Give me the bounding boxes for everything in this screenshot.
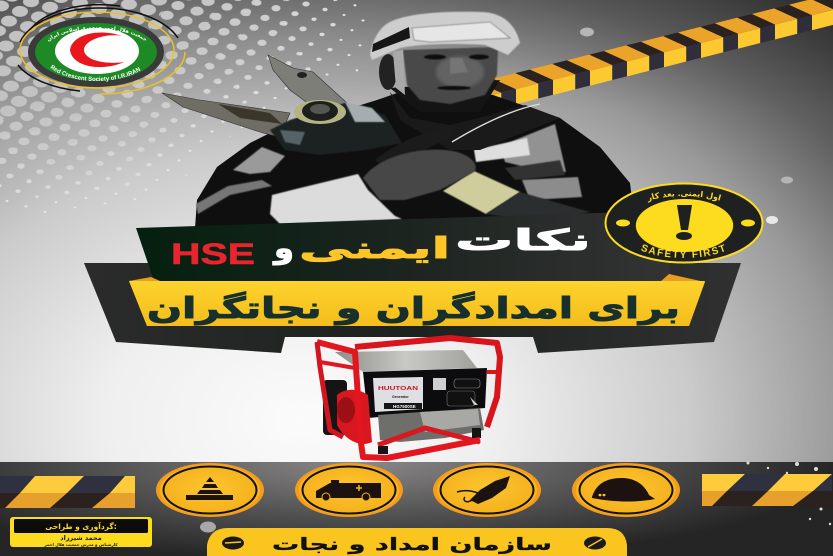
chest pads	[474, 124, 582, 200]
rescue worker with hydraulic cutter	[162, 12, 636, 228]
small grey dot	[200, 522, 216, 532]
cutter pivot	[294, 100, 346, 124]
title word: HSE: HSE	[171, 238, 255, 271]
left hazard stripes	[0, 476, 135, 508]
glove	[363, 150, 476, 200]
front frame	[317, 342, 480, 458]
exclamation mark	[677, 205, 692, 230]
icon: safety helmet	[572, 463, 680, 517]
badge text: اول ایمنی. بعد کار	[648, 190, 722, 203]
cutter upper jaw	[268, 55, 347, 110]
left pill icon	[222, 536, 244, 550]
collar	[390, 92, 560, 150]
shoulder patch	[233, 147, 285, 174]
feet	[378, 428, 481, 454]
base rails	[378, 428, 480, 445]
icon: traffic cone	[156, 463, 264, 517]
cheek shading	[436, 56, 484, 88]
logo text: جمعیت هلال احمر جمهوری اسلامی ایران	[48, 26, 146, 42]
right pill icon	[584, 536, 606, 550]
lower dark banner	[84, 263, 741, 353]
blade slot	[218, 104, 282, 124]
organisation name: سازمان امداد و نجات	[272, 535, 552, 555]
jacket	[195, 85, 636, 228]
organisation pill	[207, 528, 627, 556]
generator: Generator	[392, 395, 409, 399]
helmet visor	[412, 22, 510, 42]
title: و	[272, 231, 294, 265]
socket	[447, 391, 475, 406]
sleeve	[270, 174, 402, 224]
handle bar	[375, 127, 455, 168]
warning triangle	[470, 397, 478, 405]
yellow ribbon	[129, 274, 705, 326]
left cross bar	[320, 362, 355, 368]
subtitle: برای امدادگران و نجاتگران	[147, 291, 680, 325]
left arm stripe	[196, 180, 272, 214]
scattered grey dots	[88, 28, 793, 336]
red crescent logo: Red Crescent Society of I.R.IRAN	[50, 64, 140, 82]
alternator highlight	[420, 409, 480, 432]
engine rear	[323, 380, 347, 435]
rear frame	[355, 338, 500, 427]
crescent	[70, 32, 124, 67]
fuel tank	[335, 350, 477, 372]
alternator	[378, 408, 484, 442]
red crescent logo	[18, 4, 186, 95]
right cross bar	[487, 370, 499, 374]
jaw hole	[297, 72, 307, 78]
cutter highlight	[345, 102, 385, 122]
product label	[373, 377, 423, 412]
generator: HUUTOAN	[378, 386, 418, 392]
cutter lower jaw	[162, 93, 290, 137]
credit box: کارشناس و مدرس جمعیت هلال احمر	[43, 542, 118, 547]
title	[171, 223, 591, 271]
generator: HG7500SE	[393, 404, 416, 409]
icon: ambulance	[295, 463, 403, 517]
credit box: گردآوری و طراحی:	[45, 521, 117, 531]
generator	[317, 338, 500, 458]
gauge	[433, 378, 446, 390]
red engine	[337, 390, 372, 444]
eyes and mouth	[424, 54, 489, 90]
helmet	[370, 12, 520, 60]
helmet strap	[393, 50, 405, 95]
credit box: محمد شیرزاد	[60, 534, 102, 542]
icon: rescue cutter	[433, 463, 541, 517]
right hazard stripes	[702, 474, 833, 506]
hazard tape	[419, 0, 833, 123]
face	[403, 47, 498, 104]
title: ایمنی	[299, 231, 450, 265]
halftone dot field	[0, 0, 365, 213]
bottom band	[0, 462, 833, 556]
safety first badge	[604, 182, 764, 264]
band sparkle dots	[746, 462, 831, 525]
left side frame	[317, 342, 343, 437]
safety first badge: SAFETY FIRST	[641, 244, 724, 258]
upper dark banner	[136, 211, 672, 281]
title word: safety points: نکات	[455, 223, 591, 257]
neck	[390, 80, 500, 112]
cutter body	[270, 103, 402, 155]
control panel	[363, 368, 487, 418]
digital display	[454, 379, 480, 388]
helmet band	[372, 27, 410, 52]
yellow handle	[443, 171, 520, 214]
credit box	[10, 517, 152, 547]
hair and ear	[379, 54, 397, 90]
